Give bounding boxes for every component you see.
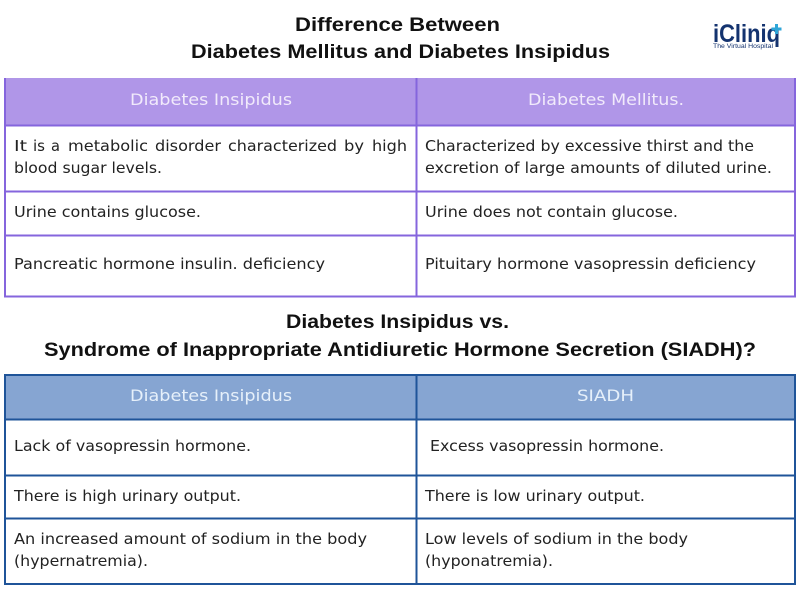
row 1 left: is xyxy=(33,137,45,155)
row 3 left: (hypernatremia). xyxy=(14,552,148,570)
row 1 left: metabolic xyxy=(68,137,148,155)
row 3 left xyxy=(14,530,367,570)
row 2 right: Urine does not contain glucose. xyxy=(425,203,678,221)
row 3 right: (hyponatremia). xyxy=(425,552,553,570)
table header: blue xyxy=(5,374,795,420)
row 1 left: a xyxy=(51,137,60,155)
table: diabetes insipidus vs SIADH xyxy=(4,374,796,584)
header label: Diabetes Insipidus: Diabetes Insipidus xyxy=(130,90,292,109)
row 1 right xyxy=(425,137,772,177)
heading: diabetes insipidus vs SIADH: Syndrome of Inappropriate Antidiuretic Hormone Secretion (SIADH)? xyxy=(44,340,756,361)
row 1 right: Excess vasopressin hormone. xyxy=(430,437,664,455)
header label: Diabetes Mellitus: Diabetes Mellitus. xyxy=(528,90,684,109)
logo: iCliniq: The Virtual Hospital xyxy=(713,43,774,50)
row 3 right: Pituitary hormone vasopressin deficiency xyxy=(425,255,756,273)
logo: iCliniq: iCliniq xyxy=(713,20,780,48)
table header: purple xyxy=(5,78,795,126)
row 3 right xyxy=(425,530,688,570)
title: difference between diabetes mellitus and insipidus: Difference Between xyxy=(295,15,500,36)
title: difference between diabetes mellitus and insipidus xyxy=(191,15,610,63)
heading: diabetes insipidus vs SIADH: Diabetes Insipidus vs. xyxy=(286,312,509,333)
header label: SIADH: SIADH xyxy=(577,386,634,405)
row 1 left: Lack of vasopressin hormone. xyxy=(14,437,251,455)
row 1 left xyxy=(14,137,407,177)
row 1 left: characterized xyxy=(228,137,337,155)
row 3 right: Low levels of sodium in the body xyxy=(425,530,688,548)
row 3 left: Pancreatic hormone insulin. deficiency xyxy=(14,255,325,273)
row 2 left: There is high urinary output. xyxy=(13,487,241,505)
row 1 right: excretion of large amounts of diluted urine. xyxy=(425,159,772,177)
title: difference between diabetes mellitus and insipidus: Diabetes Mellitus and Diabetes Insipidus xyxy=(191,42,610,63)
row 1 left: by xyxy=(344,137,364,155)
row 1 left: It xyxy=(14,137,27,155)
heading: diabetes insipidus vs SIADH xyxy=(44,312,756,361)
row 1 right: Characterized by excessive thirst and the xyxy=(425,137,754,155)
row 1 left: blood sugar levels. xyxy=(14,159,162,177)
header label: Diabetes Insipidus: Diabetes Insipidus xyxy=(130,386,292,405)
row 1 left: disorder xyxy=(155,137,222,155)
table: diabetes insipidus vs mellitus xyxy=(4,78,796,296)
row 1 left: high xyxy=(372,137,407,155)
row 3 left: An increased amount of sodium in the body xyxy=(14,530,367,548)
row 2 left: Urine contains glucose. xyxy=(14,203,201,221)
row 2 right: There is low urinary output. xyxy=(424,487,645,505)
